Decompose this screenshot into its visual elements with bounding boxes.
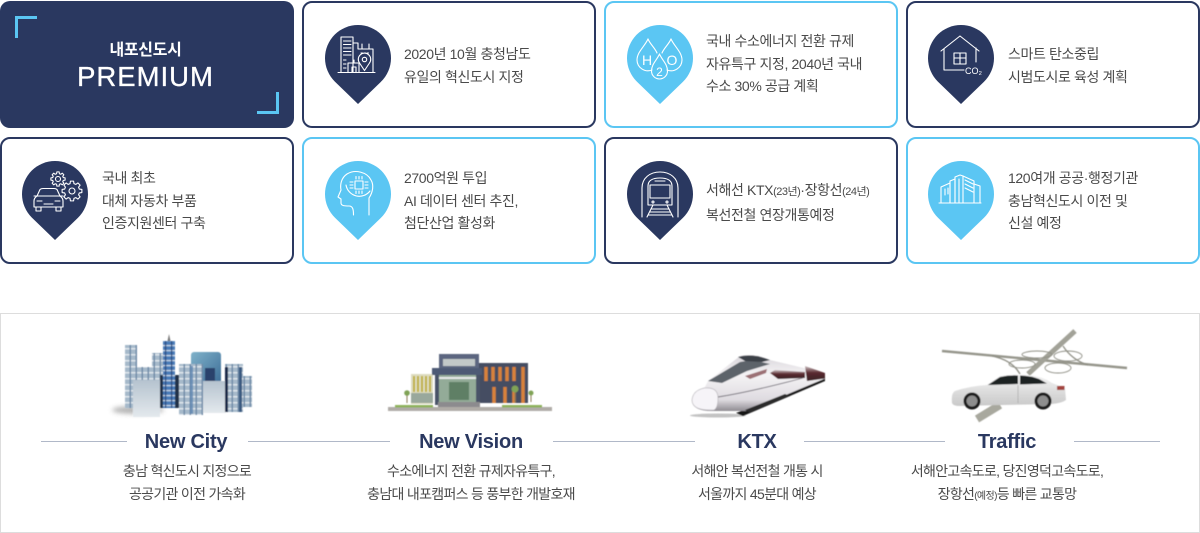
panel: hydrogen energy: [604, 1, 898, 128]
text: AI investment: [404, 170, 518, 231]
icon: H2O drops pin: O: [667, 52, 678, 68]
text: relocation plan: 신설 예정: [1008, 215, 1062, 231]
illustration: car on interchange: [942, 331, 1127, 419]
icon: H2O drops pin: [627, 25, 693, 104]
text: KTX description: 서울까지 45분대 예상: [698, 486, 816, 502]
text: New City description: 공공기관 이전 가속화: [129, 486, 245, 502]
text: carbon neutral: [1008, 46, 1128, 84]
text: certification center: 대체 자동차 부품: [102, 192, 197, 208]
text: hydrogen plan: 수소 30% 공급 계획: [706, 78, 818, 94]
heading: PREMIUM: PREMIUM: [77, 61, 214, 92]
panel: innovation city designation: [302, 1, 596, 128]
text: relocation plan: 충남혁신도시 이전 및: [1008, 192, 1128, 208]
illustration: KTX train: [690, 355, 825, 418]
heading: New City: New City: [145, 431, 227, 453]
text: AI investment: AI 데이터 센터 추진,: [404, 192, 518, 208]
corner bracket: top left: [15, 16, 37, 38]
text: hydrogen plan: 국내 수소에너지 전환 규제: [706, 33, 854, 49]
panel: four premiums strip: [0, 313, 1200, 533]
text: KTX description: [691, 463, 823, 502]
icon: city buildings pin: [325, 25, 391, 104]
icon: H2O drops pin: 2: [656, 65, 663, 79]
text: certification center: [102, 170, 206, 231]
rule: right of Traffic: [1074, 441, 1160, 442]
text: relocation plan: [1008, 170, 1138, 231]
heading: KTX: KTX: [737, 431, 777, 453]
rule: New City to New Vision: [248, 441, 390, 442]
heading: Traffic: Traffic: [978, 431, 1036, 453]
text: New Vision description: 수소에너지 전환 규제자유특구,: [387, 463, 555, 479]
icon: AI head pin: [325, 161, 391, 240]
text: certification center: 국내 최초: [102, 170, 156, 186]
text: hydrogen plan: [706, 33, 862, 94]
icon: office buildings pin: [928, 161, 994, 240]
panel: carbon neutral city: [906, 1, 1200, 128]
text: KTX and Janghang line: [706, 182, 870, 222]
panel: premium title card: [0, 1, 294, 128]
text: KTX and Janghang line: 복선전철 연장개통예정: [706, 206, 835, 222]
text: designation: 유일의 혁신도시 지정: [404, 68, 524, 84]
rule: New Vision to KTX: [553, 441, 695, 442]
text: Traffic description: [911, 463, 1103, 502]
rule: KTX to Traffic: [804, 441, 945, 442]
text: New Vision description: 충남대 내포캠퍼스 등 풍부한 개발호재: [367, 486, 575, 502]
panel: AI data center: [302, 137, 596, 264]
text: hydrogen plan: 자유특구 지정, 2040년 국내: [706, 56, 862, 72]
text: AI investment: 2700억원 투입: [404, 170, 487, 186]
panel: car parts certification: [0, 137, 294, 264]
text: carbon neutral: 시범도시로 육성 계획: [1008, 68, 1128, 84]
corner bracket: bottom right: [257, 92, 279, 114]
text: designation: [404, 46, 530, 84]
text: New Vision description: [367, 463, 575, 502]
text: Traffic description: 서해안고속도로, 당진영덕고속도로,: [911, 463, 1103, 479]
panel: public institutions: [906, 137, 1200, 264]
heading: New Vision: New Vision: [419, 431, 523, 453]
icon: car and gears pin: [22, 161, 88, 240]
text: relocation plan: 120여개 공공·행정기관: [1008, 170, 1138, 186]
icon: CO2 house pin: [928, 25, 994, 104]
text: New City description: [123, 463, 252, 502]
icon: train pin: [627, 161, 693, 240]
text: KTX description: 서해안 복선전철 개통 시: [691, 463, 823, 479]
illustration: campus building: [388, 354, 552, 411]
rule: left of New City: [41, 441, 127, 442]
heading: 내포신도시: 내포신도시: [109, 42, 182, 59]
icon: H2O drops pin: H: [642, 52, 652, 68]
text: certification center: 인증지원센터 구축: [102, 215, 206, 231]
text: designation: 2020년 10월 충청남도: [404, 46, 530, 62]
text: KTX and Janghang line: 서해선 KTX(23년)·장항선(24년): [706, 182, 869, 198]
icon: CO2 house pin: CO₂: [965, 66, 982, 76]
text: carbon neutral: 스마트 탄소중립: [1008, 46, 1099, 62]
illustration: city skyline: [112, 334, 252, 417]
text: New City description: 충남 혁신도시 지정으로: [123, 463, 251, 479]
panel: rail extension: [604, 137, 898, 264]
text: AI investment: 첨단산업 활성화: [404, 215, 495, 231]
text: Traffic description: 장항선(예정)등 빠른 교통망: [938, 486, 1076, 502]
